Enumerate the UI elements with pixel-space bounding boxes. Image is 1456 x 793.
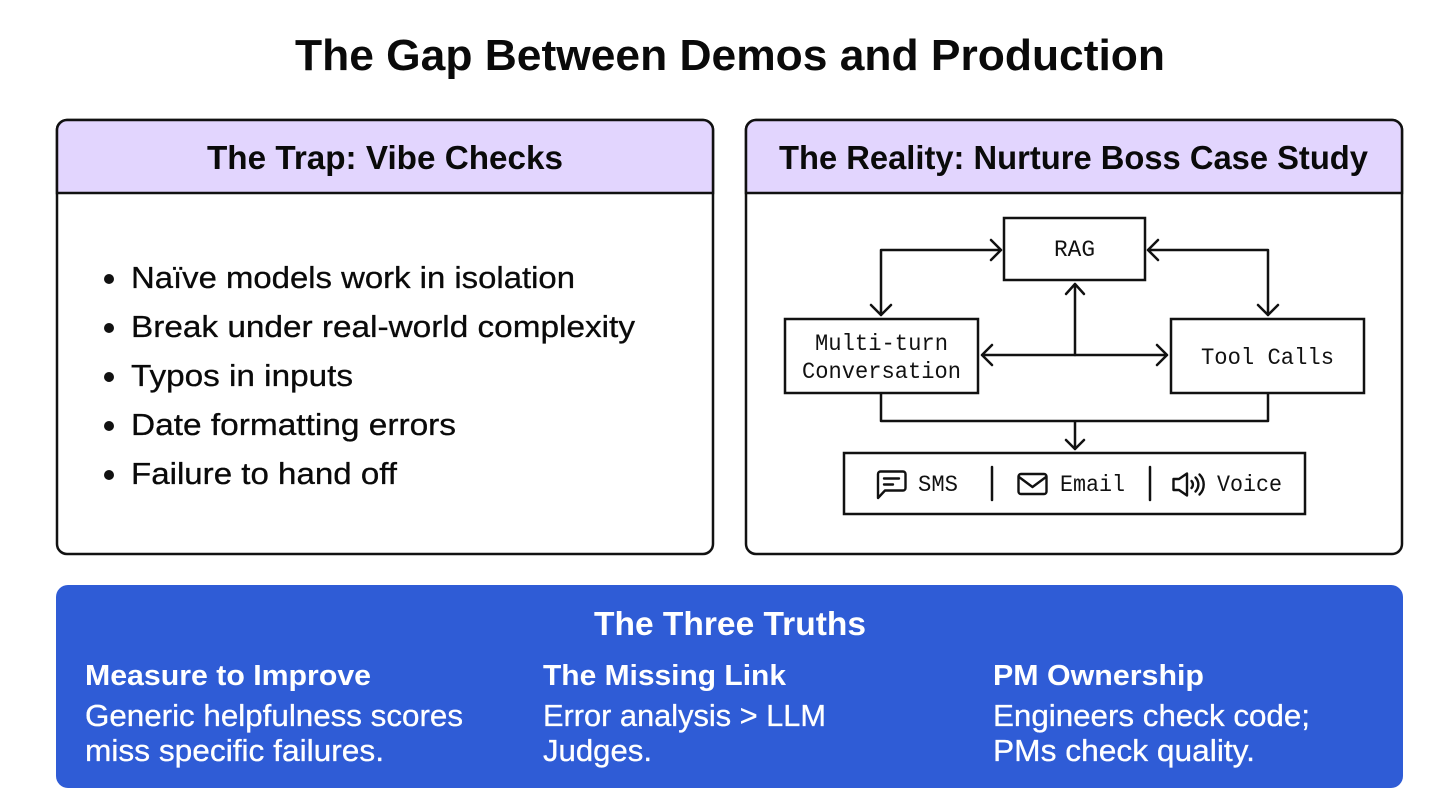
bullet list: Naïve models work in isolation <box>131 260 575 295</box>
arrow: RAG to multi-turn <box>871 240 1001 315</box>
box: multi-turn conversation: Multi-turn <box>815 331 948 357</box>
box: RAG <box>1004 218 1145 280</box>
column: measure to improve: Generic helpfulness scores <box>85 698 463 733</box>
banner heading: The Three Truths <box>594 605 866 642</box>
panel background <box>746 120 1402 554</box>
panel header band <box>57 120 713 193</box>
box: channels <box>844 453 1305 514</box>
arrow: merge down to channels <box>881 393 1268 449</box>
column: PM ownership: PM Ownership <box>993 660 1204 692</box>
flow diagram <box>785 218 1364 514</box>
banner background <box>56 585 1403 788</box>
arrow: RAG to tool calls <box>1148 240 1278 315</box>
column: the missing link: Error analysis > LLM <box>543 698 826 733</box>
bullet list <box>104 260 636 491</box>
bullet list: Date formatting errors <box>131 407 456 442</box>
column: PM ownership: Engineers check code; <box>993 698 1310 733</box>
label: Email: Email <box>1060 472 1125 498</box>
panel: the trap <box>57 120 713 554</box>
column: measure to improve: Measure to Improve <box>85 660 371 692</box>
column: PM ownership: PMs check quality. <box>993 733 1255 768</box>
box: RAG: RAG <box>1054 237 1095 263</box>
label: SMS: SMS <box>918 472 958 498</box>
panel background <box>57 120 713 554</box>
box: multi-turn conversation <box>785 319 978 393</box>
title: The Gap Between Demos and Production <box>295 31 1165 80</box>
box: tool calls: Tool Calls <box>1201 345 1334 371</box>
icon: chat bubble <box>878 472 906 498</box>
bullet list: Failure to hand off <box>131 456 397 491</box>
label: Voice: Voice <box>1217 472 1282 498</box>
column: PM ownership <box>993 660 1310 768</box>
column: measure to improve <box>85 660 463 768</box>
column: the missing link <box>543 660 826 768</box>
arrow: centre up to RAG <box>1066 284 1084 355</box>
bullet list: Typos in inputs <box>131 358 353 393</box>
panel heading: The Trap: Vibe Checks <box>207 139 563 176</box>
arrow: multi-turn to tool calls <box>982 345 1167 365</box>
bullet list: Break under real-world complexity <box>131 309 636 344</box>
panel heading: The Reality: Nurture Boss Case Study <box>779 139 1369 176</box>
column: the missing link: The Missing Link <box>543 660 787 692</box>
panel header band <box>746 120 1402 193</box>
panel: the three truths <box>56 585 1403 788</box>
column: measure to improve: miss specific failures. <box>85 733 384 768</box>
icon: speaker <box>1174 474 1204 496</box>
box: tool calls <box>1171 319 1364 393</box>
column: the missing link: Judges. <box>543 733 652 768</box>
box: multi-turn conversation: Conversation <box>802 359 961 385</box>
icon: envelope <box>1018 474 1046 494</box>
panel: the reality <box>746 120 1402 554</box>
